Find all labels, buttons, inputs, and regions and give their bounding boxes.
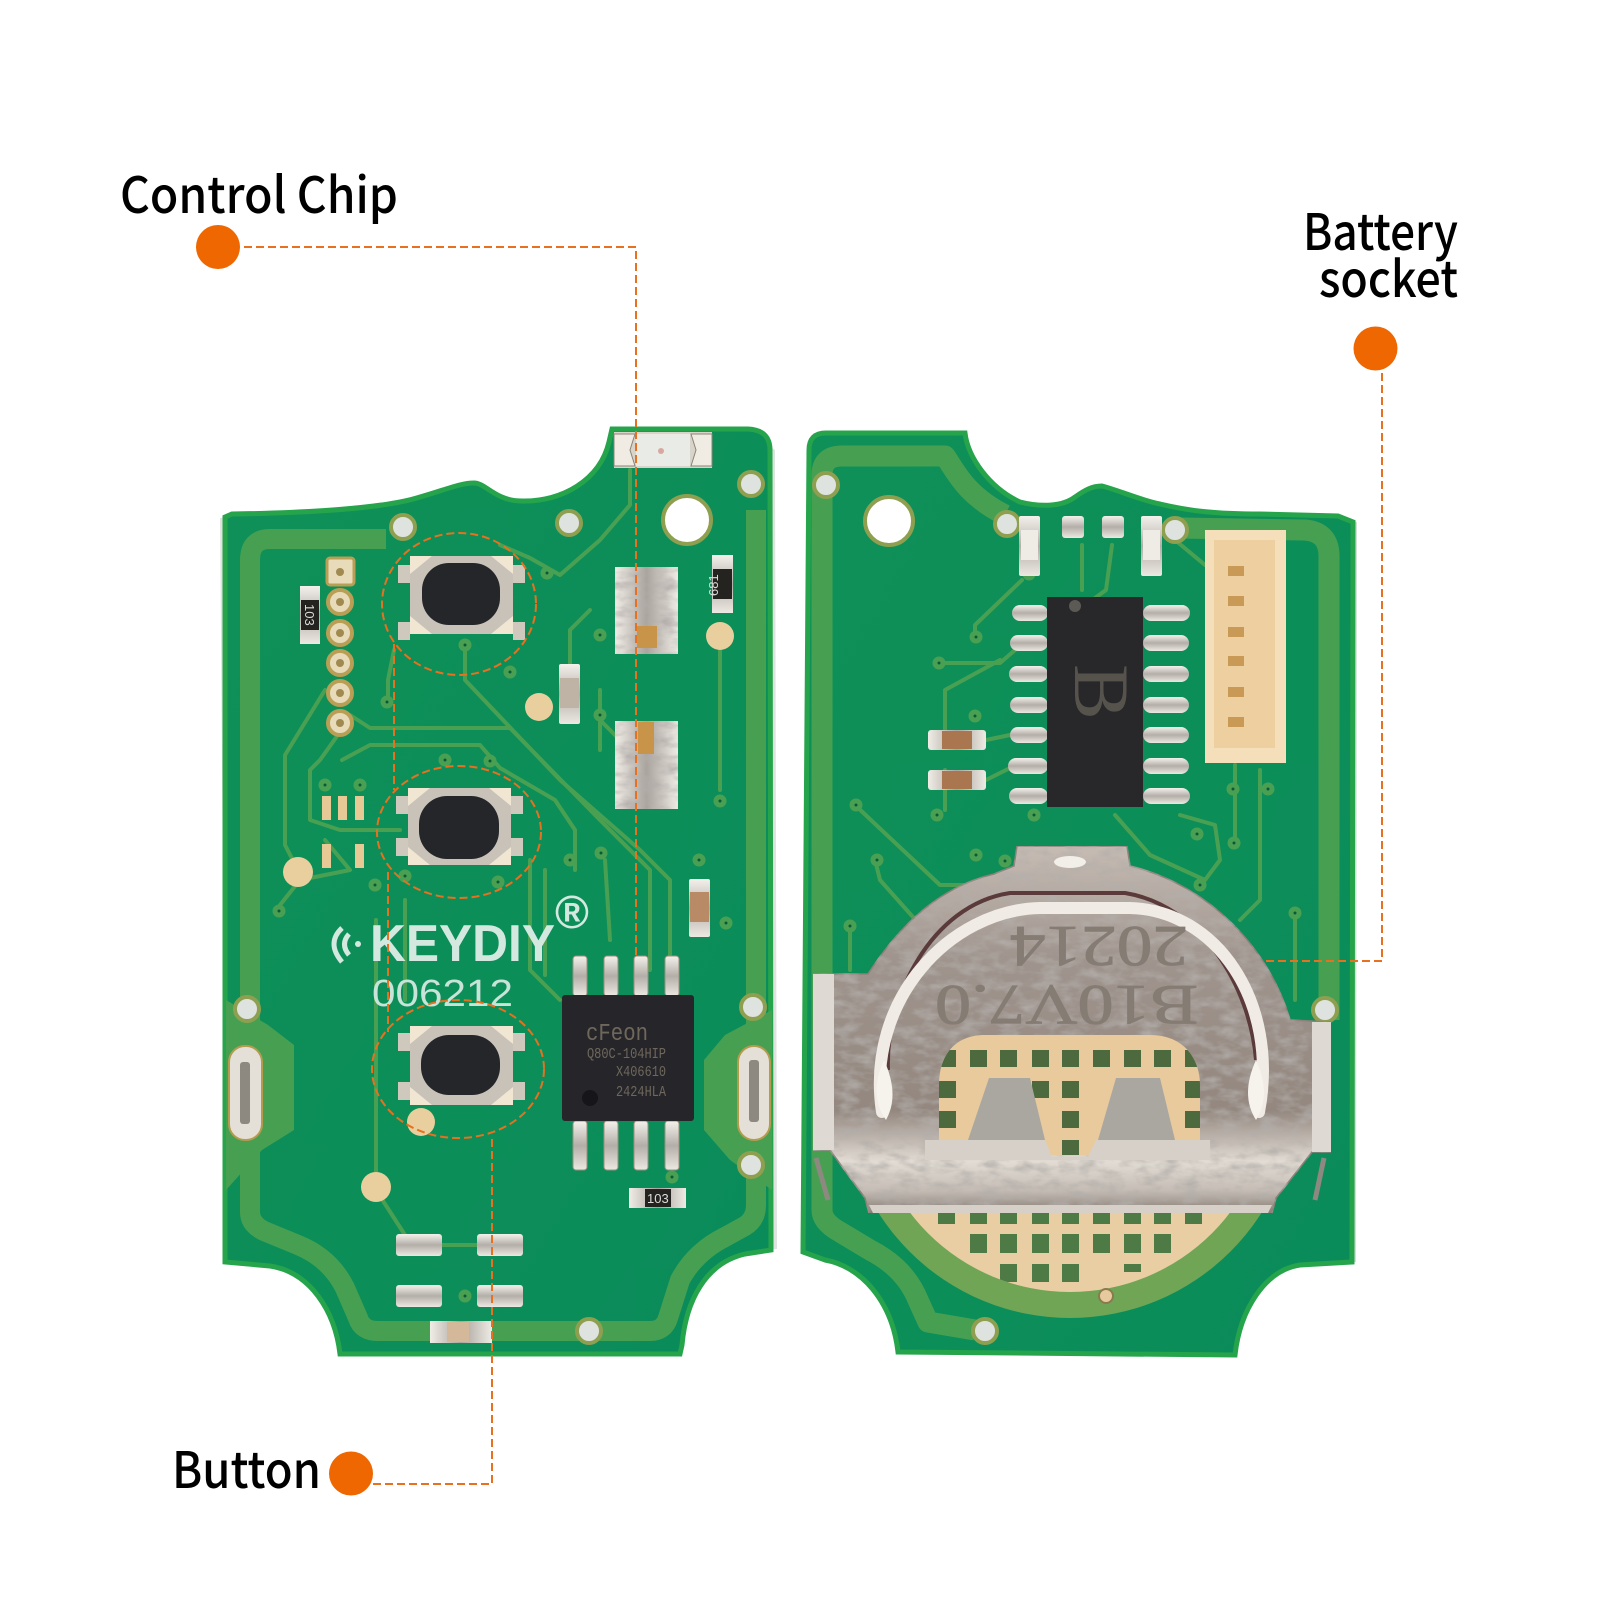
marker dot [1354,326,1398,370]
highlight ring button 2 [377,766,541,898]
tactile button 3 [398,1026,525,1105]
KEYDIY logo [334,886,589,973]
highlight ring button 3 [372,1000,544,1138]
silver shield pads [615,567,678,809]
marker dot [329,1452,373,1496]
back board outline [803,433,1353,1355]
holder stamped code B10V7.0: B10V7.0 [935,973,1198,1036]
part number: 006212 [372,973,513,1015]
label: Control Chip: Control Chip [120,156,398,228]
top capacitors [1019,516,1162,576]
label: Battery socket [1303,193,1458,312]
leader line [1265,373,1382,961]
marker dot [196,225,240,269]
highlight arc bulges [876,1060,1264,1120]
capacitor components [559,664,710,937]
KEYDIY logo: KEYDIY [370,915,555,973]
battery holder [813,846,1331,1213]
bottom solder pads [396,1234,523,1307]
circuit traces [280,470,720,1245]
holder pins [816,1158,1324,1200]
solder test points [283,622,734,1202]
mounting holes [235,472,765,1343]
panel: back of circuit board [803,433,1357,1355]
SOP14 IC [1008,597,1190,807]
board substrate edge [1350,520,1357,1262]
SOP8 control chip: cFeon [586,1021,648,1048]
SOP14 IC: B [1058,664,1145,720]
SOP8 control chip: Q80C-104HIP [587,1046,666,1063]
holder stamped code 20214: 20214 [1010,914,1188,979]
SOP8 control chip [562,956,694,1170]
vias [846,570,1299,930]
connecting dashed links [388,644,394,1032]
contact surrounds [226,1000,772,1190]
small pads [322,796,364,868]
ground trace band [822,456,1329,1330]
dark slit of holder [888,893,1256,1070]
resistor 103 horizontal [629,1188,686,1208]
bottom capacitor [430,1321,492,1343]
holder window with pad grid [939,1035,1202,1155]
side wings [813,974,1331,1152]
battery pad under holder [878,1213,1262,1318]
white connector [1205,530,1286,763]
callout: control chip [120,156,636,955]
KEYDIY logo: ® [555,886,589,938]
resistor 681 [706,555,733,613]
ground trace band [250,510,756,1331]
holder top bump [1054,856,1086,868]
label: Button: Button [172,1431,321,1503]
panel: front of circuit board [220,429,777,1354]
callout: button [172,533,544,1503]
header pads [327,558,354,735]
front board outline [225,429,771,1354]
tactile button 1 [398,556,525,640]
circuit traces [850,540,1295,1000]
board substrate edge [220,445,777,1262]
chip capacitors [928,730,986,790]
resistor 681: 681 [706,574,721,596]
resistor 103 horizontal: 103 [647,1191,669,1206]
resistor 103 vertical [300,586,320,644]
resistor 103 vertical: 103 [302,604,317,626]
label: Battery socket: Battery [1303,193,1458,265]
small square pads [1062,516,1124,538]
SOP8 control chip: 2424HLA [616,1084,666,1101]
holder highlight arc [880,908,1263,1112]
vias [275,569,730,1300]
SOP8 control chip: X406610 [616,1064,666,1081]
tactile button 2 [396,788,523,865]
label: Battery socket: socket [1319,240,1458,312]
side contact left [229,1046,262,1140]
mounting holes [814,473,1337,1343]
callout: battery socket [1265,193,1458,961]
holder metal body [813,846,1331,1213]
holder bottom lip [869,1140,1272,1213]
holder contact tabs [968,1078,1175,1140]
leader line [373,1137,492,1484]
LED [614,432,712,468]
side contact right [738,1046,770,1140]
highlight ring button 1 [382,533,536,675]
leader line [244,247,636,955]
